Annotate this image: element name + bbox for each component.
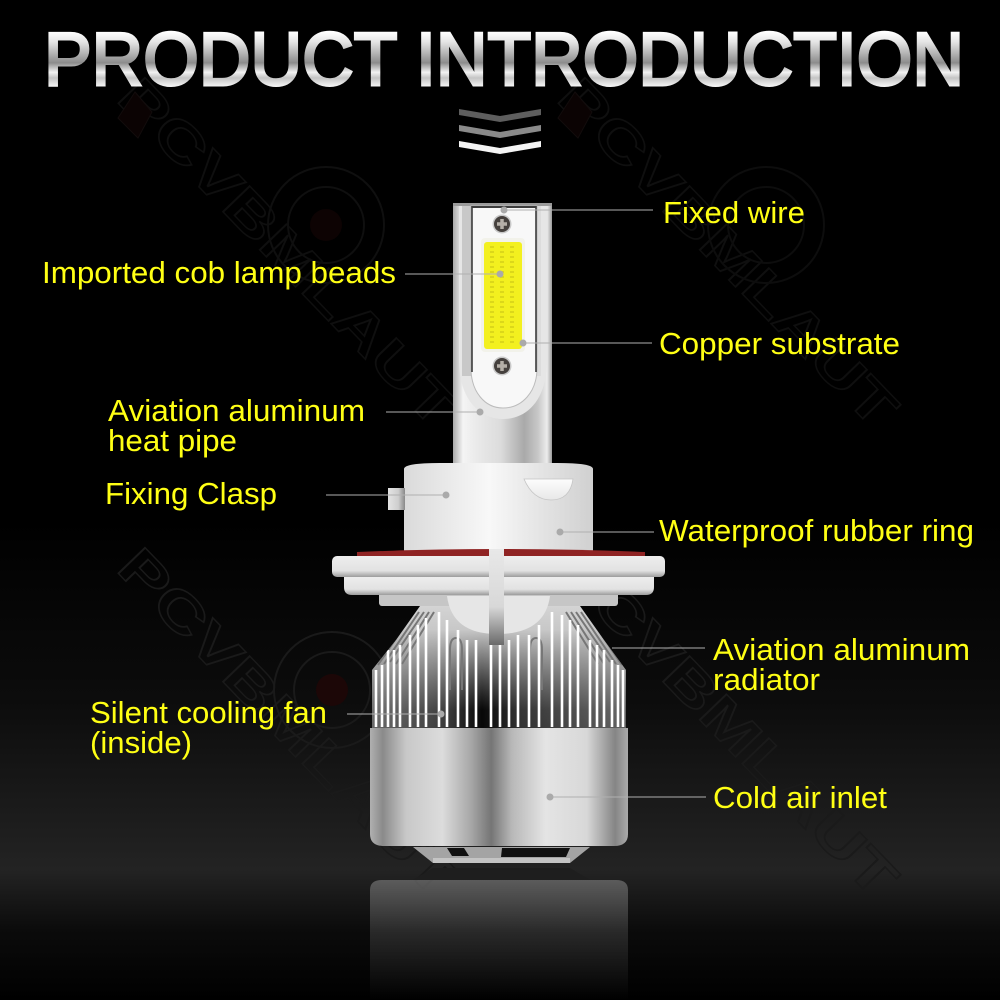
leader: rubber ring xyxy=(556,528,654,536)
red rubber ring xyxy=(357,549,645,556)
label: cooling fan xyxy=(90,695,327,760)
leader: air inlet xyxy=(546,794,706,800)
title: PRODUCT INTRODUCTION xyxy=(44,17,964,101)
leader: radiator xyxy=(612,647,705,649)
leader: lamp beads xyxy=(405,270,504,278)
label: lamp beads: Imported cob lamp beads xyxy=(42,255,396,290)
watermark: PCVBMLAUT xyxy=(546,537,909,909)
leaders xyxy=(326,206,706,800)
label: copper substrate: Copper substrate xyxy=(659,326,900,361)
leader: cooling fan xyxy=(347,710,444,718)
label: rubber ring: Waterproof rubber ring xyxy=(659,513,974,548)
lower flange xyxy=(379,592,618,606)
watermark: PCVBMLAUT xyxy=(106,67,469,439)
label: heat pipe: Aviation aluminum xyxy=(108,393,365,428)
watermark: PCVBMLAUT xyxy=(546,67,909,439)
label: radiator xyxy=(713,632,970,697)
side clasp xyxy=(388,488,405,510)
LED chip xyxy=(481,238,525,352)
label: fixing clasp: Fixing Clasp xyxy=(105,476,277,511)
bulb neck / heat pipe xyxy=(453,203,552,466)
leader: fixed wire xyxy=(500,206,653,214)
leader: copper substrate xyxy=(520,340,652,346)
label: heat pipe: heat pipe xyxy=(108,423,237,458)
label: radiator: radiator xyxy=(713,662,820,697)
half-moon tab xyxy=(524,479,573,500)
leader: fixing clasp xyxy=(326,492,450,498)
icon: chevrons xyxy=(459,109,541,154)
label: air inlet: Cold air inlet xyxy=(713,780,887,815)
half disc xyxy=(447,596,550,634)
label: cooling fan: (inside) xyxy=(90,725,192,760)
bulb xyxy=(332,203,665,863)
clip strap xyxy=(489,549,504,645)
label: fixed wire: Fixed wire xyxy=(663,195,805,230)
mid flange xyxy=(344,576,654,595)
watermark: PCVBMLAUT xyxy=(106,537,469,909)
label: cooling fan: Silent cooling fan xyxy=(90,695,327,730)
screw top xyxy=(492,214,512,234)
cylinder collar xyxy=(404,463,593,552)
leader: heat pipe xyxy=(386,408,484,416)
screw bottom xyxy=(492,356,512,376)
label: heat pipe xyxy=(108,393,365,458)
label: radiator: Aviation aluminum xyxy=(713,632,970,667)
reflection of bulb xyxy=(370,868,628,1000)
top flange xyxy=(332,556,665,577)
watermark xyxy=(106,67,909,909)
can body xyxy=(370,728,628,846)
fins xyxy=(371,600,629,728)
base vent xyxy=(413,847,590,863)
